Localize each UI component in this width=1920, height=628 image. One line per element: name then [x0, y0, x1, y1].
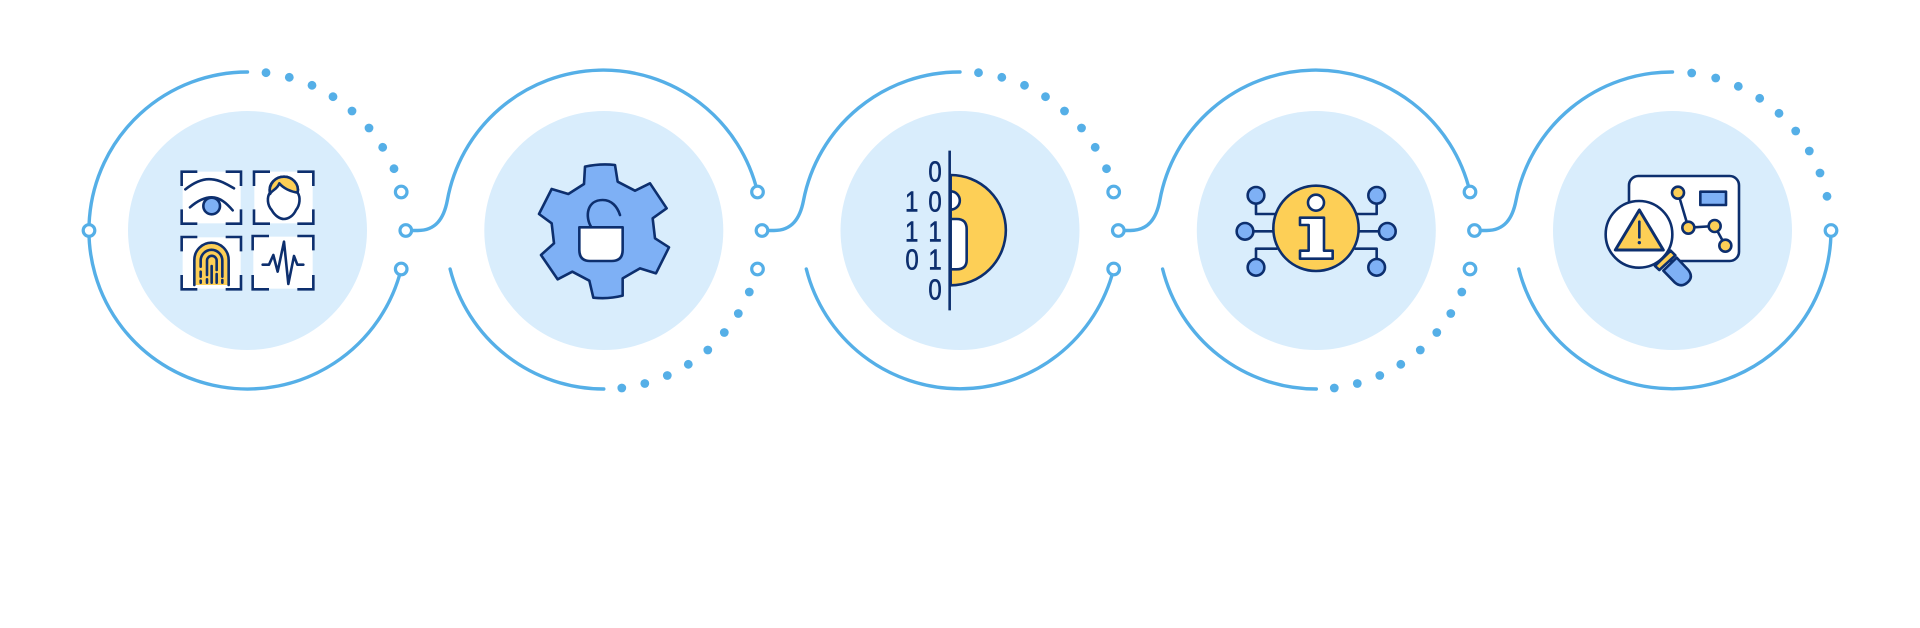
panel: step 4 information network [1112, 70, 1476, 392]
icon: biometric scans [182, 172, 313, 289]
binary digits: 0 [928, 186, 942, 218]
step 3 ring [756, 68, 1120, 389]
binary digits: 0 [905, 245, 919, 277]
step 5 ring [1469, 69, 1837, 389]
icon: magnifier alert over chart [1606, 176, 1739, 285]
panel: step 2 unlocked settings [400, 70, 763, 392]
binary digits [905, 157, 942, 306]
step 1 ring [83, 68, 407, 389]
binary digits: 0 [928, 274, 942, 306]
binary digits: 1 [905, 217, 918, 249]
panel: step 3 binary information [756, 68, 1120, 389]
icon: info hub [1237, 186, 1396, 276]
binary digits: 1 [928, 245, 942, 277]
binary digits: 1 [928, 217, 942, 249]
step 2 ring [400, 70, 763, 392]
icon: half binary info symbol [905, 151, 1006, 310]
icon: gear with open padlock [539, 164, 669, 298]
binary digits: 0 [928, 157, 942, 189]
panel: step 1 biometrics [83, 68, 407, 389]
step 4 ring [1112, 70, 1476, 392]
binary digits: 1 [905, 186, 918, 218]
panel: step 5 alert analysis [1469, 69, 1837, 389]
